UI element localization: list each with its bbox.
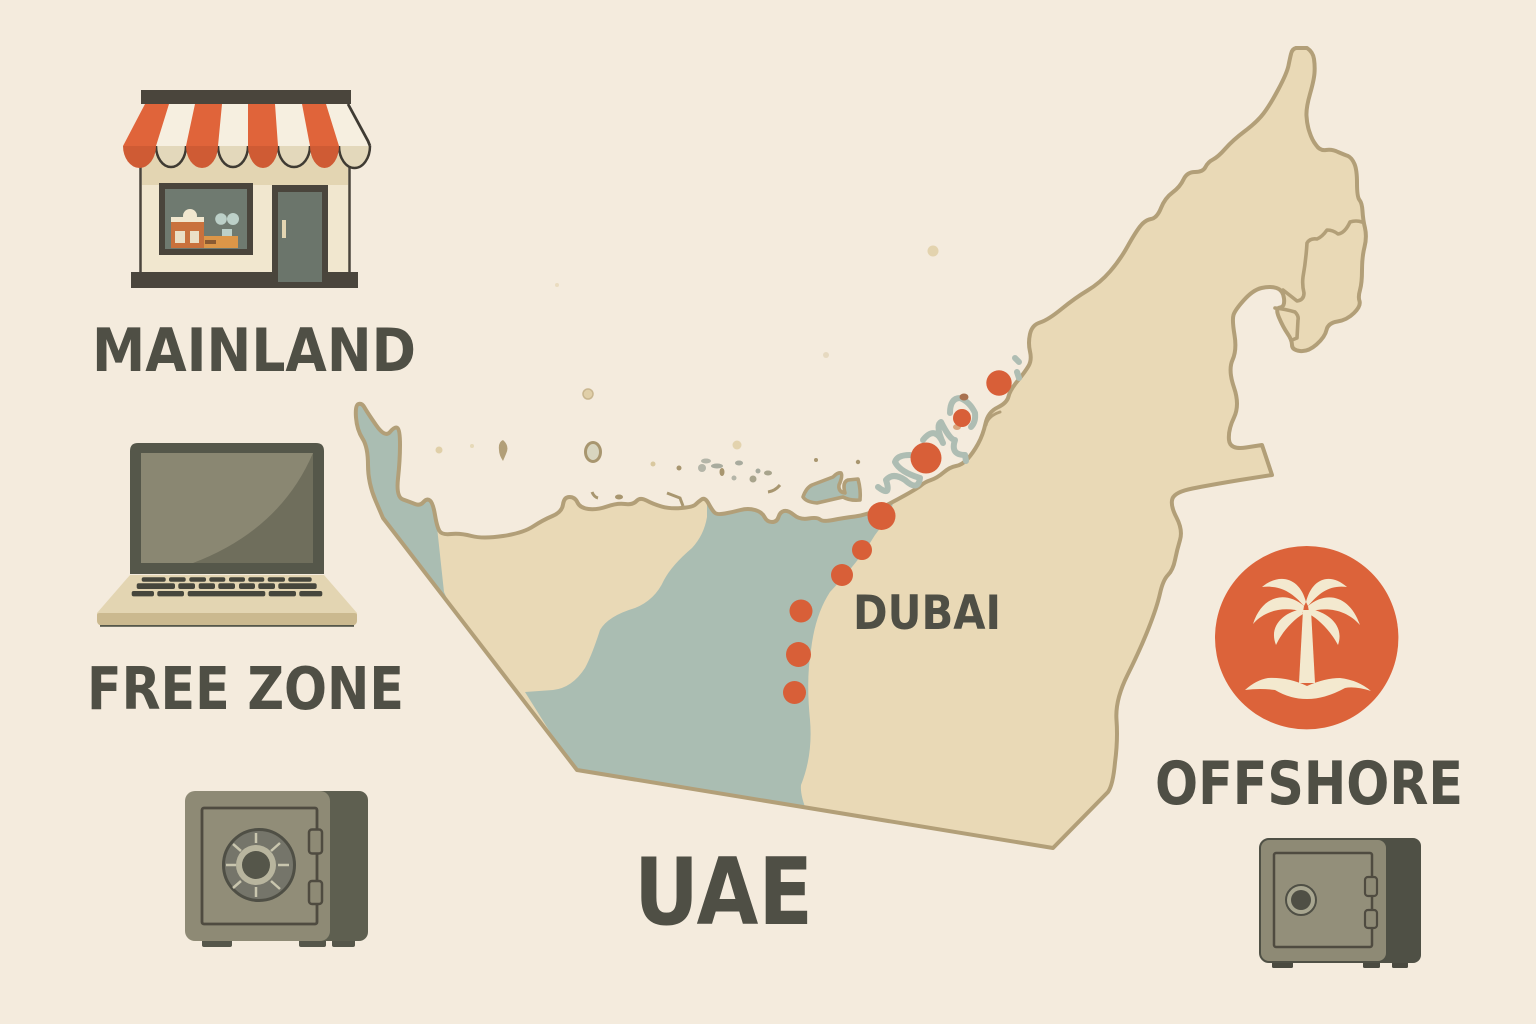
laptop screen lid xyxy=(130,443,324,574)
label: OFFSHORE: OFFSHORE xyxy=(1155,749,1463,819)
island wave xyxy=(1245,678,1371,699)
small safe door xyxy=(1274,853,1372,947)
store shade band xyxy=(142,155,348,185)
laptop base xyxy=(97,575,357,625)
laptop display xyxy=(141,453,313,563)
icon: storefront xyxy=(123,90,370,288)
small safe side xyxy=(1340,838,1421,963)
map land: sand region xyxy=(356,48,1366,848)
icon: palm island badge xyxy=(1215,546,1398,729)
Dubai coastline dots xyxy=(783,370,1012,704)
small safe front xyxy=(1260,839,1387,962)
laptop bottom shadow xyxy=(100,625,354,627)
label: MAINLAND: MAINLAND xyxy=(92,316,416,386)
map outline xyxy=(356,48,1366,848)
map: UAE xyxy=(340,48,1366,848)
map region: western free zone strip xyxy=(358,406,446,597)
store awning xyxy=(123,104,370,168)
safe side xyxy=(300,791,368,941)
store top bar xyxy=(141,90,351,104)
icon: safe with dial xyxy=(185,791,368,947)
store walls xyxy=(140,150,350,274)
small safe feet xyxy=(1272,961,1408,968)
icon: laptop xyxy=(97,443,357,627)
label: UAE: UAE xyxy=(634,838,813,946)
safe door xyxy=(202,808,317,924)
store door xyxy=(272,185,328,288)
label: DUBAI: DUBAI xyxy=(853,586,1001,641)
map: offshore islands xyxy=(436,246,938,506)
laptop front edge xyxy=(97,613,357,626)
store base xyxy=(131,272,358,288)
map: Dubai creek inlet xyxy=(986,412,1000,425)
palm tree xyxy=(1253,579,1360,683)
safe hinges xyxy=(309,830,322,904)
map region: central free zone xyxy=(525,495,895,812)
safe dial xyxy=(224,830,294,900)
map: small reef marks xyxy=(953,394,968,430)
map: northern inner borders xyxy=(1275,221,1362,340)
badge circle xyxy=(1215,546,1398,729)
small safe lock xyxy=(1286,885,1316,915)
store window xyxy=(159,183,253,255)
laptop display reflection xyxy=(141,453,313,563)
map: palm island squiggles xyxy=(878,358,1019,491)
safe front xyxy=(185,791,330,941)
laptop keyboard xyxy=(132,577,322,596)
map: World Islands xyxy=(803,473,860,503)
icon: small safe xyxy=(1260,838,1421,968)
small safe hinges xyxy=(1365,877,1377,928)
safe feet xyxy=(202,939,355,947)
label: FREE ZONE: FREE ZONE xyxy=(87,654,404,723)
